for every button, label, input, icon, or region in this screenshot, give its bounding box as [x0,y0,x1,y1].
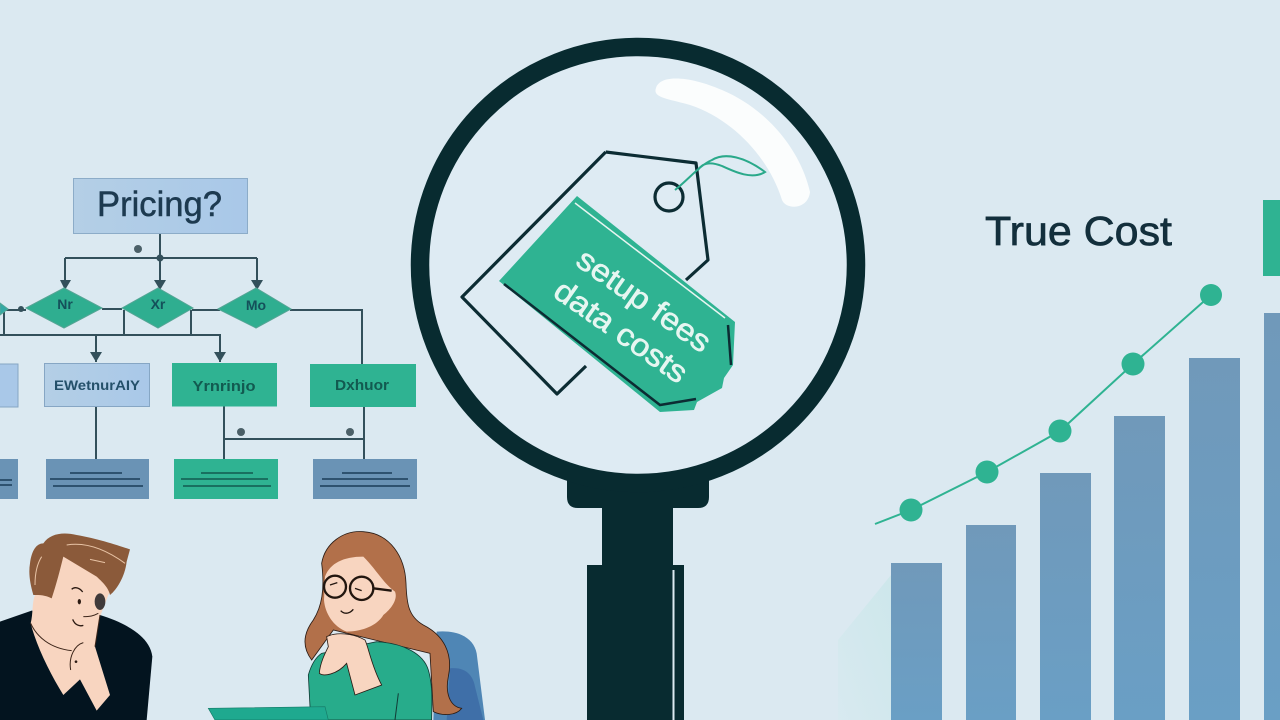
diamond labels: Mo [246,297,266,313]
price tag [462,152,765,412]
chart: true cost [838,200,1280,720]
tag string [675,156,765,190]
bars [891,313,1280,720]
magnifying glass [420,47,856,720]
person: man in black shirt [0,533,152,720]
flowchart: pricing decision [0,178,417,499]
laptop [208,707,328,720]
diamond labels: Xr [151,296,166,312]
label text: setup fees [570,241,718,359]
connector dots [134,245,354,436]
trend line [875,284,1222,524]
person: woman with glasses at laptop [208,532,485,720]
option boxes: EWetnurAIY [54,377,141,393]
label text: data costs [548,273,695,390]
magnifier lens [420,47,856,483]
option boxes: Dxhuor [335,377,389,394]
chart title: True Cost [985,208,1173,254]
flowchart question box: Pricing? [97,185,222,224]
faint haze [838,575,891,720]
green block [1263,200,1280,276]
glasses [324,576,392,600]
chair [433,631,485,720]
flowchart question box [74,178,248,234]
magnifier handle [567,478,709,720]
diamond labels [57,296,266,313]
decision diamonds [0,288,291,328]
result boxes [0,459,417,499]
diamond labels: Nr [57,296,73,312]
option boxes [0,363,416,407]
option boxes: Yrnrinjo [192,378,256,395]
label text [548,241,718,390]
green label [499,196,735,412]
lens highlight [655,78,810,207]
